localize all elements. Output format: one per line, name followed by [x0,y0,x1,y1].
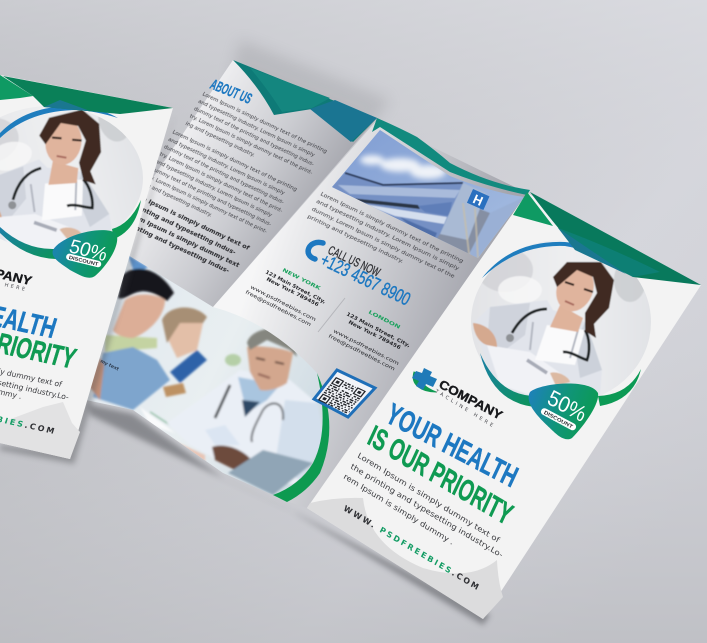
heading: is our priority: IS OUR PRIORITY [363,420,517,532]
QR code [314,370,375,417]
address: new york: NEW YORK [281,268,323,293]
address: new york [244,268,327,328]
photo: medical team [88,256,322,495]
call us heading: CALL US NOW [326,243,383,280]
badge: 50% discount: 50% [66,236,110,266]
text block: about paragraph 2: dummy text of the printing and typesetting indus- [162,144,285,206]
footer wave [307,498,503,619]
text block: about paragraph 1: ing and typesetting industry. [184,121,256,159]
text block: about bold: the printing and typesetting indus- [119,196,238,257]
panel: left brochure [0,75,173,459]
panel: front cover [307,192,701,619]
badge: 50% discount: DISCOUNT [68,255,99,268]
address: new york: 123 Main Street, City, [264,270,327,305]
badge: 50% discount: LIVE OUT TODAY [545,413,571,430]
text block: about paragraph 2: try. Lorem Ipsum is simply dummy text of the print- [158,152,284,214]
photo: hospital building [332,130,524,258]
text block: about paragraph 2: and typesetting industry. Lorem Ipsum is simply [167,137,286,196]
badge: 50% discount: DISCOUNT [543,410,574,431]
arc: green lower left [480,353,534,407]
person: blonde nurse [88,308,207,410]
text block: contact intro: printing and typesetting industry. [306,214,405,265]
text block: about bold [109,187,251,277]
phone number: +123 4567 8900 [317,249,414,309]
text block: contact intro: dummy. Lorem Ipsum is simply dummy text of the [310,207,456,280]
text block: about paragraph 2: dummy text of the printing and typesetting indus- [150,166,272,228]
text block: about paragraph 1: try. Lorem Ipsum is simply dummy text of the print- [188,114,314,176]
arc: teal lower [0,227,56,259]
person: dark-haired nurse [113,269,174,338]
text block: about bold: the printing and typesetting indus- [112,214,231,275]
panel background [70,60,377,400]
text block: about paragraph 2: and typesetting industry. Lorem Ipsum is simply [154,159,273,219]
text block: about paragraph 1: Lorem Ipsum is simply dummy text of the printing [201,92,328,155]
footer wave [0,402,80,459]
text block: contact intro: and typesetting industry. Lorem Ipsum is simply [315,199,460,272]
address: london: www.psdfreebies.com [332,329,400,367]
logo: company: COMPANY [437,377,505,423]
logo: company [0,259,34,293]
address: new york: New York 789456 [265,277,320,308]
top band [513,192,701,285]
icon: H sign: H [471,191,485,209]
panel background [307,193,701,619]
arc: green lower right [598,369,641,406]
person: male doctor [167,329,325,495]
text block: about paragraph 2: ing and typesetting industry. [141,181,213,219]
text block: front body: the printing and typesetting industry.Lo- [349,462,505,560]
text block: about paragraph 2: try. Lorem Ipsum is simply dummy text of the print- [145,174,268,235]
icon: phone [308,242,323,259]
website: WWW. PSDFREEBIES.COM [342,504,480,592]
panel background [0,75,173,459]
address: london: New York 789456 [347,320,402,351]
badge: 50% discount [53,230,117,278]
text block: front body [342,451,505,560]
arc: blue [0,106,118,138]
text block: contact intro: Lorem Ipsum is simply dummy text of the printing [319,192,464,265]
address: london: 123 Main Street, City, [345,312,411,349]
panel: about us [70,60,377,400]
address: new york: www.psdfreebies.com [249,285,317,323]
text block: about paragraph 2: Lorem Ipsum is simply dummy text of the printing [171,130,298,193]
text block: about bold: Lorem Ipsum is simply dummy text of [124,187,251,252]
address: london: LONDON [367,310,401,331]
top band [372,118,530,195]
badge: 50% discount: 50% [544,385,590,427]
text block: about paragraph 1 [184,92,328,184]
left brochure shadow [0,112,176,464]
icon: H sign [467,189,489,211]
heading: your health: YOUR HEALTH [381,398,523,494]
photo: female doctor [0,110,143,242]
header band [233,60,377,142]
address: london [327,310,411,372]
arc: photo green crescent [273,373,329,502]
photo: female doctor [471,243,651,396]
top band [0,75,173,114]
heading: about us: ABOUT US [207,76,255,107]
brochure shadow [88,40,490,625]
photo: medical team: my text [99,359,121,373]
logo: company [412,368,505,429]
panel: contact [213,118,530,508]
logo: company: TACLINE HERE [433,388,494,429]
address: london: free@psdfreebies.com [327,334,396,372]
arc: green right [112,200,141,239]
text block: about paragraph 2 [141,130,298,244]
text block: about paragraph 1: and typesetting industry. Lorem Ipsum is simply [197,99,316,158]
address: new york: free@psdfreebies.com [244,290,312,328]
text block: front body: Lorem Ipsum is simply dummy text of [356,451,501,545]
text block: about paragraph 1: dummy text of the printing and typesetting indus- [192,106,315,168]
text block: front body: rem Ipsum is simply dummy . [342,472,455,547]
badge: 50% discount [529,383,598,439]
text block: about bold: Lorem Ipsum is simply dummy text [123,209,241,269]
text block: contact intro [306,192,464,287]
arc: blue [482,242,612,278]
panel background [213,120,527,508]
